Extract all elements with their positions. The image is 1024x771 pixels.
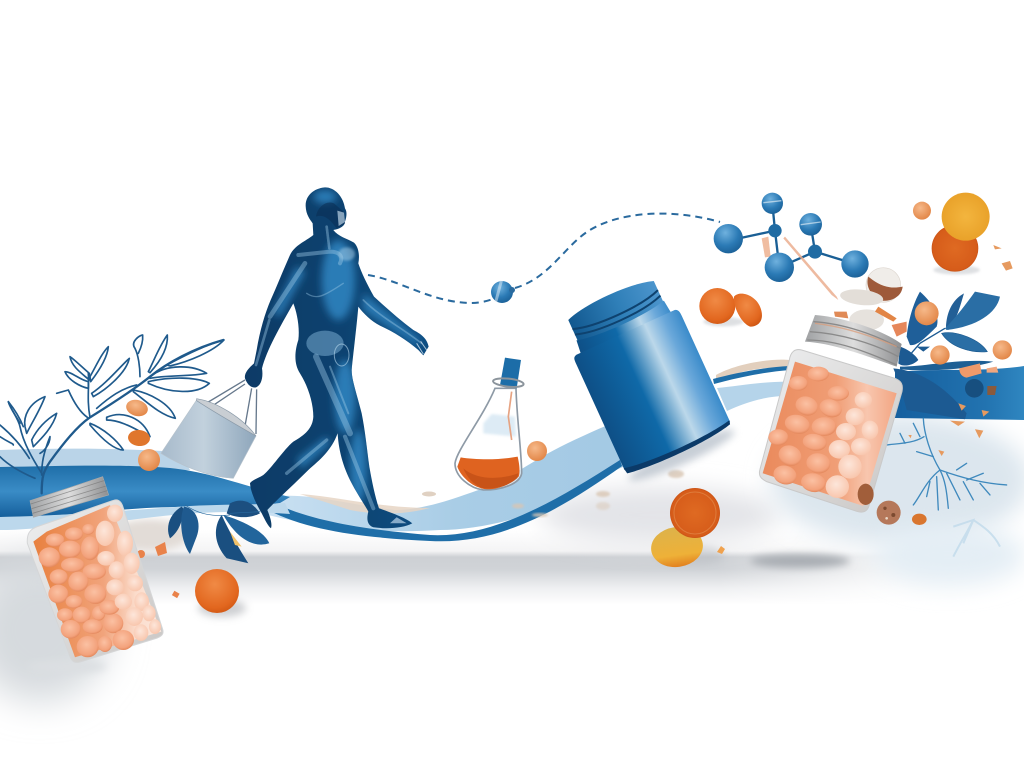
flask wash [483,414,516,437]
jar body [759,350,902,512]
bucket body [161,400,256,478]
orange ball [195,569,246,617]
coins [648,488,724,570]
human figure [245,187,429,528]
capsule and tablets above jar [834,268,907,337]
dashed path [368,214,720,303]
dark ball on leaf [965,379,984,398]
roots [887,418,1007,510]
jar shadow [27,660,107,673]
background leaves [893,292,1000,419]
jar contents [33,505,161,657]
bucket [161,380,257,478]
small orange pill by flask [527,441,547,461]
skeleton bones [256,227,422,508]
jar contents [763,362,897,506]
flask cap [500,358,521,388]
flask [455,358,524,490]
flask glass [455,388,522,490]
left jar [27,477,163,673]
body shading [273,190,420,503]
ribbon: left wave [0,449,290,530]
hand bones [417,341,427,354]
orange pills around leaves [913,202,1012,378]
flask liquid [457,457,520,489]
crumbs near left jar [137,542,180,598]
bucket rim [197,399,256,436]
small tan crumbs on ribbon [422,470,684,517]
foot highlight [390,517,407,523]
body silhouette [245,187,429,528]
orange ball and oval [699,288,762,327]
jar shadow [625,423,738,487]
jar base [624,420,733,477]
molecule sticks [728,203,855,267]
right jar [759,315,902,512]
blue jar [556,271,738,487]
ribbon: middle wave [268,360,800,541]
flask rim [493,377,524,388]
background: shadow band [0,415,1024,702]
jar cap [566,276,665,345]
pills [768,367,849,494]
orange pills near the plant [124,397,160,471]
bucket handles [203,380,257,434]
chest highlight [338,247,355,261]
jar body [573,308,732,474]
ribbon: right band [895,366,1024,420]
molecule: orange streak [783,237,838,300]
skull [316,202,345,228]
flask streak [508,392,512,440]
jar cap [805,315,902,367]
small crumb [717,546,725,554]
jar neck [575,300,673,358]
left plant [0,335,224,493]
brown pill in jar [858,484,874,505]
pelvis [306,331,344,356]
jar cap [30,477,109,517]
coins top right [932,193,990,275]
right group [699,193,1013,557]
jar body [27,500,163,662]
pills [39,524,134,657]
faint lower root [953,520,1000,557]
cap grooves [572,290,663,340]
crumbs [908,245,1013,525]
small leaves near foot [168,501,269,563]
brown cluster pill [877,501,901,525]
icon: small capsule node [491,280,515,303]
molecule balls [714,193,869,282]
